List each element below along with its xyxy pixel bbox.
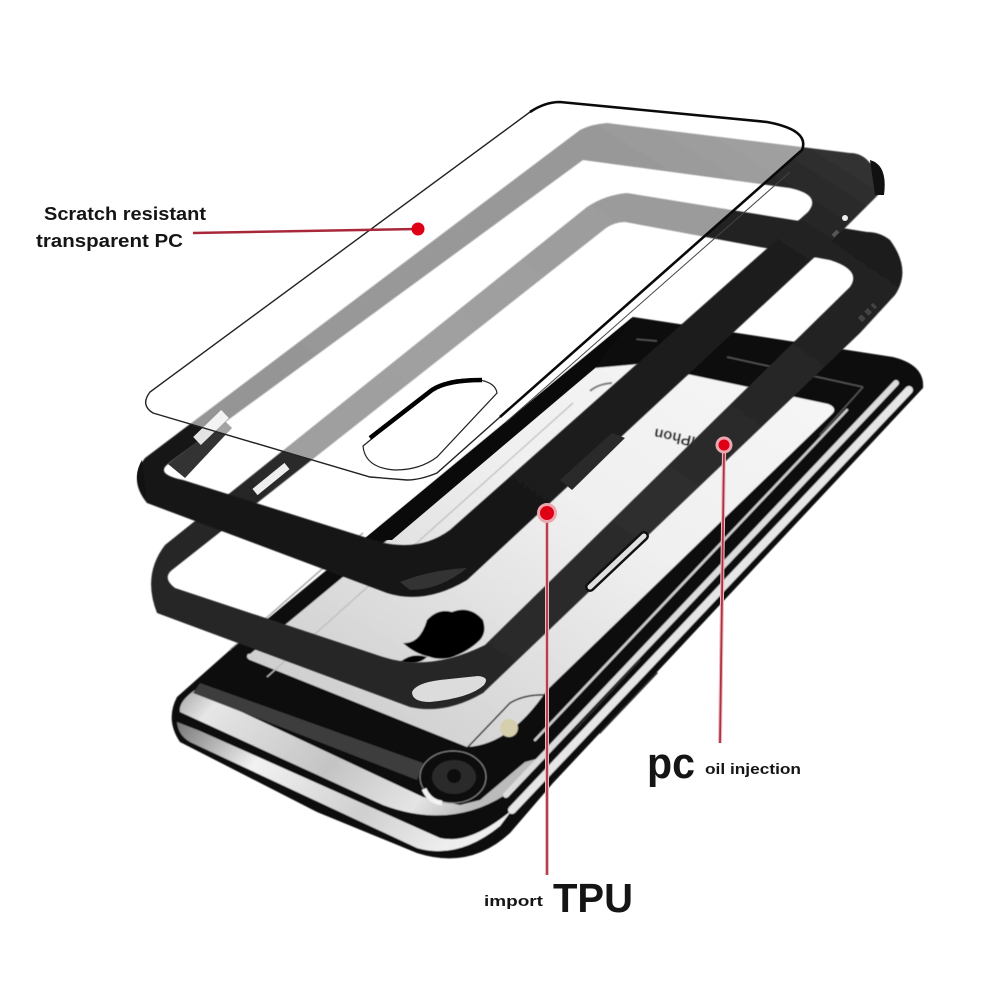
label text line two: transparent PC bbox=[36, 231, 183, 251]
first frame: import TPU bbox=[137, 123, 882, 597]
pointer line bbox=[720, 452, 724, 743]
callout: pc oil injection bbox=[647, 438, 801, 788]
frame button recess bbox=[560, 433, 625, 490]
white phone back bbox=[247, 363, 834, 747]
camera lens bbox=[420, 751, 486, 803]
small label: import bbox=[484, 894, 543, 910]
small arc on back bbox=[590, 383, 612, 391]
grey rim strip bbox=[193, 683, 423, 780]
callout: scratch resistant transparent PC bbox=[36, 204, 424, 251]
lower chrome strip bbox=[177, 722, 512, 851]
apple logo bbox=[400, 610, 484, 663]
inner band lines bbox=[610, 337, 863, 435]
pointer line halo bbox=[720, 452, 724, 743]
faint reflection lines bbox=[267, 403, 573, 677]
second frame: PC oil injection bbox=[151, 193, 902, 709]
frame one side nubs bbox=[137, 160, 885, 500]
side button on second frame bbox=[590, 536, 644, 587]
phone black stripe seen through the frame window bbox=[363, 317, 633, 540]
camera bump outline bbox=[467, 695, 547, 748]
big label: pc bbox=[647, 739, 695, 788]
phone body bbox=[172, 317, 923, 858]
pointer line bbox=[546, 520, 548, 875]
frame one slot through glass bbox=[197, 414, 225, 441]
black left stripe of phone bbox=[230, 317, 640, 654]
glass camera cutout bbox=[363, 379, 497, 470]
red dot bbox=[412, 222, 424, 236]
callout: import TPU bbox=[484, 504, 633, 921]
glass pane bbox=[146, 102, 803, 480]
pointer line halo bbox=[545, 520, 549, 875]
speaker cutout on second frame bbox=[412, 676, 486, 702]
side reflections bbox=[506, 383, 909, 810]
upper chrome strip bbox=[180, 690, 540, 815]
upside-down iPhone text: iPhon bbox=[653, 424, 697, 450]
label text line one: Scratch resistant bbox=[44, 204, 206, 224]
glass thick top and right edge bbox=[500, 102, 803, 417]
frame one holes bbox=[833, 231, 838, 236]
thin left chrome edge bbox=[230, 533, 363, 650]
red dot bbox=[538, 504, 556, 522]
phone outer edge bbox=[172, 317, 923, 858]
flash bbox=[500, 719, 518, 737]
second frame holes bbox=[860, 305, 875, 320]
glass edge double line bbox=[505, 172, 790, 423]
label line bbox=[193, 229, 417, 233]
frame two white slot below glass bbox=[255, 466, 287, 492]
frame one headphone hole bbox=[842, 215, 848, 221]
frame one inner wall at left corner bbox=[168, 421, 232, 478]
big label: TPU bbox=[553, 875, 633, 921]
small label: oil injection bbox=[705, 761, 801, 778]
speaker recess on first frame bbox=[400, 568, 467, 590]
red dot bbox=[717, 438, 731, 452]
glass back panel: scratch resistant transparent PC bbox=[146, 102, 803, 480]
